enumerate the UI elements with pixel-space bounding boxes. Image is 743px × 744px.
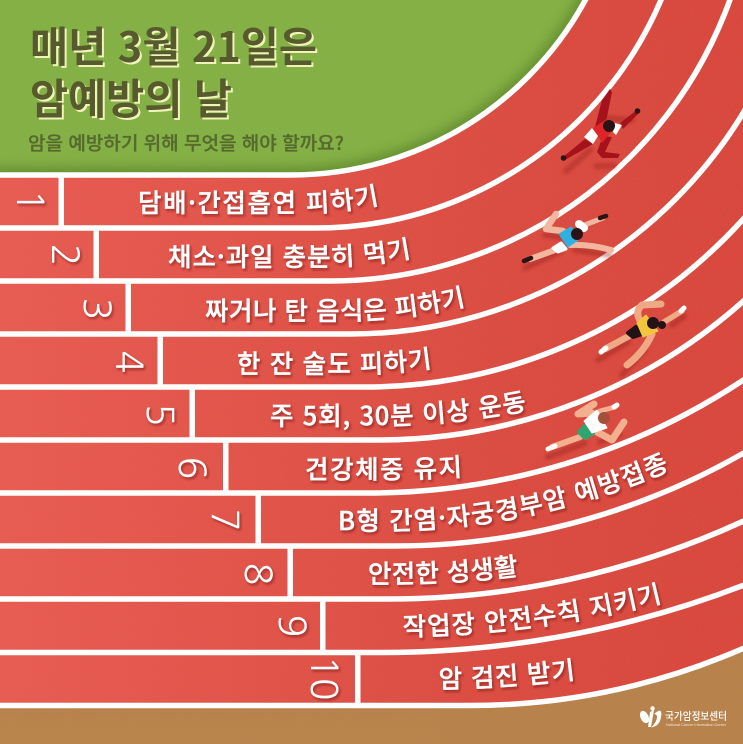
label 5: 주 5회, 30분 이상 운동 — [270, 390, 527, 433]
lane numbers — [11, 190, 342, 700]
number 9: 9 — [273, 615, 310, 637]
runner: yellow — [598, 304, 684, 375]
number 8: 8 — [239, 563, 276, 585]
runner: red — [561, 89, 640, 171]
label 1: 담배·간접흡연 피하기 — [140, 184, 380, 218]
subtitle: 암을 예방하기 위해 무엇을 해야 할까요? — [28, 130, 344, 156]
logo english name: National Cancer Information Center — [666, 722, 727, 727]
title — [30, 14, 319, 129]
label 3: 짜거나 탄 음식은 피하기 — [206, 285, 466, 326]
green infield — [0, 0, 582, 172]
label 10: 암 검진 받기 — [440, 658, 576, 694]
number 4: 4 — [110, 351, 147, 373]
number 7: 7 — [206, 509, 243, 531]
logo mark — [638, 706, 661, 728]
label 2: 채소·과일 충분히 먹기 — [168, 236, 412, 272]
number 6: 6 — [173, 457, 210, 479]
label 8: 안전한 성생활 — [369, 554, 519, 588]
label 4: 한 잔 술도 피하기 — [238, 346, 432, 379]
lane labels — [140, 184, 668, 694]
title: 매년 3월 21일은 — [32, 16, 319, 77]
logo wordmark: 국가암정보센터 — [665, 708, 727, 724]
label 9: 작업장 안전수칙 지키기 — [403, 582, 662, 641]
logo: National Cancer Information Center — [638, 706, 727, 728]
number 10: 10 — [305, 656, 342, 700]
runner: blue — [524, 214, 611, 268]
number 3: 3 — [78, 298, 115, 320]
label 7: B형 간염·자궁경부암 예방접종 — [340, 452, 668, 536]
number 5: 5 — [141, 404, 178, 426]
brown ground — [0, 700, 743, 744]
label 6: 건강체중 유지 — [306, 454, 462, 484]
title: 암예방의 날 — [30, 66, 232, 127]
ground lower right — [440, 630, 743, 744]
runner: green — [548, 404, 624, 457]
lane start lines — [58, 175, 360, 705]
title: 매년 3월 21일은 — [30, 14, 317, 75]
number 1: 1 — [11, 190, 48, 212]
title: 암예방의 날 — [32, 68, 234, 129]
number 2: 2 — [46, 244, 83, 266]
